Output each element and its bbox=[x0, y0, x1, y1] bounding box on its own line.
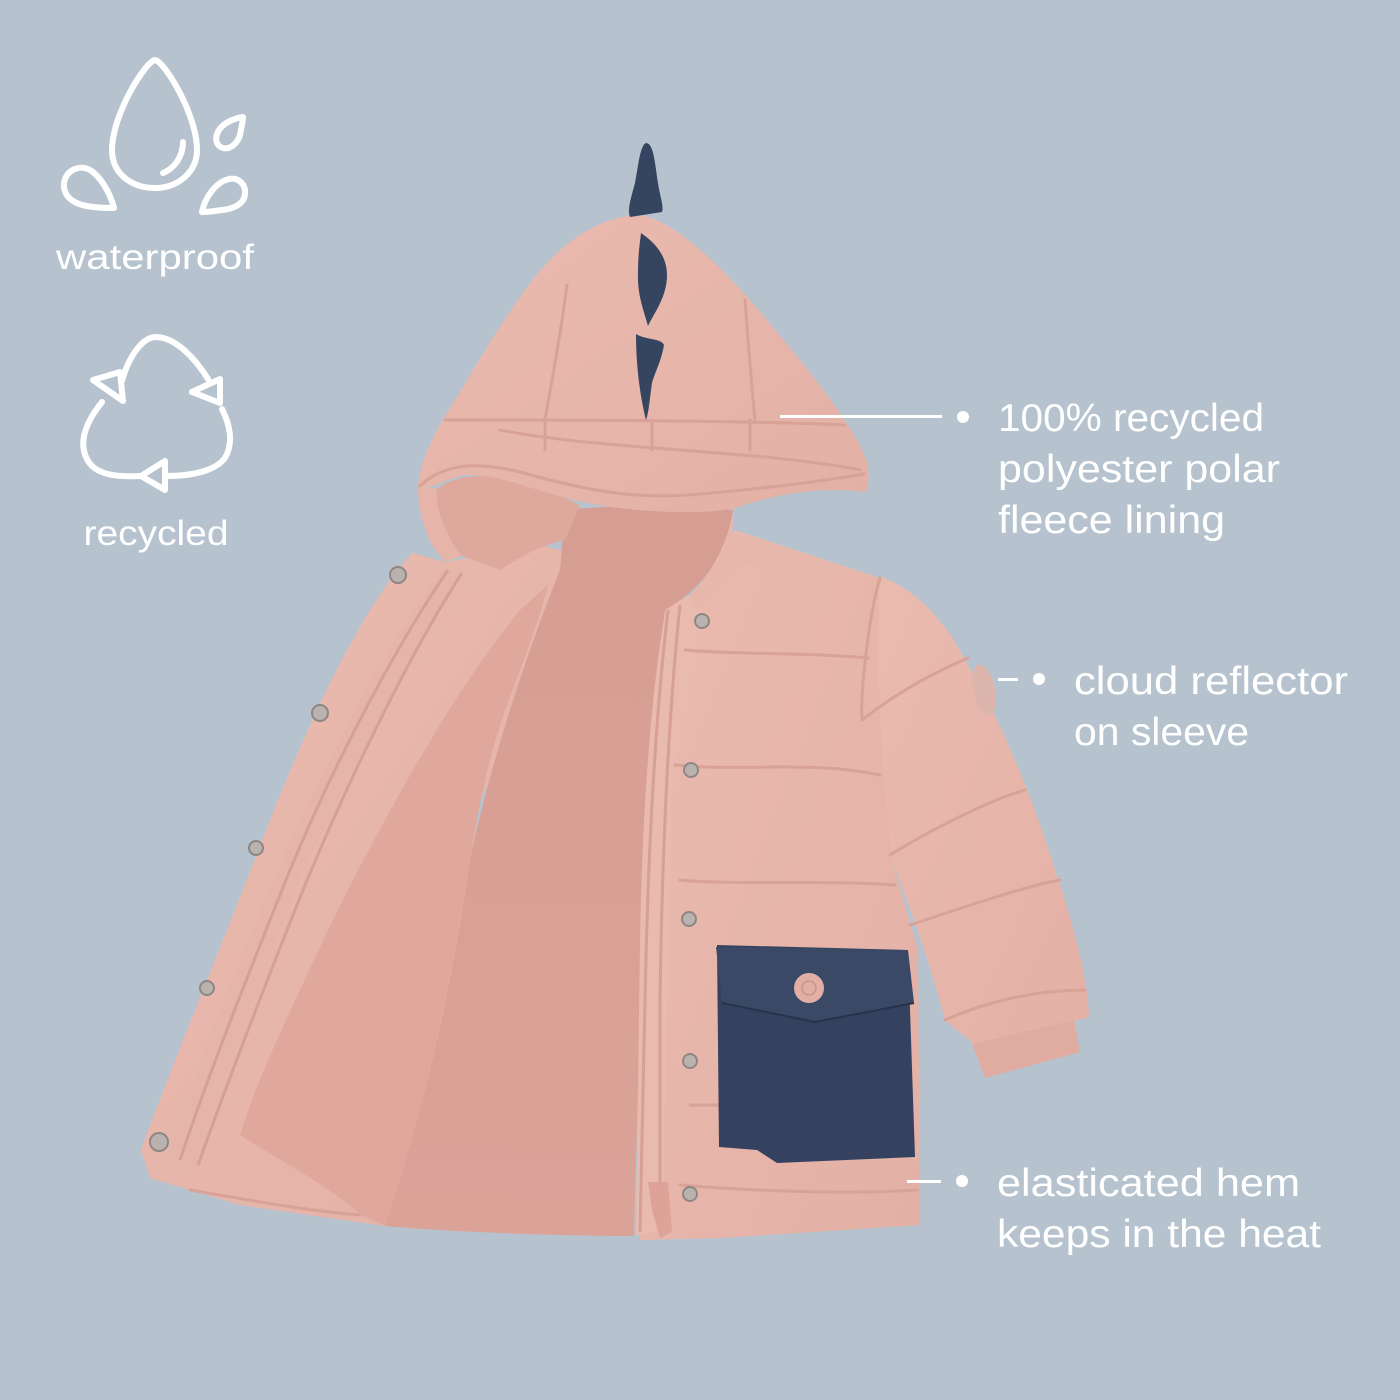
callout text: elasticated hem bbox=[997, 1162, 1300, 1205]
fleece lining, centre bbox=[385, 506, 733, 1236]
icon: recycled arrows bbox=[83, 337, 230, 490]
pocket button bbox=[794, 973, 824, 1003]
leader line bbox=[998, 673, 1045, 685]
main jacket left flap (shell) bbox=[141, 545, 600, 1226]
leader line bbox=[780, 411, 969, 423]
leader line bbox=[907, 1175, 968, 1187]
hood gather left bbox=[418, 488, 462, 562]
right collar bbox=[690, 505, 880, 610]
callout text: polyester polar bbox=[998, 448, 1280, 491]
snap buttons left bbox=[150, 567, 406, 1151]
label: recycled: recycled bbox=[84, 514, 228, 553]
snap buttons right bbox=[682, 614, 709, 1201]
sleeve reflector bbox=[968, 662, 1000, 718]
callout: cloud reflector bbox=[998, 660, 1348, 754]
jacket illustration bbox=[141, 143, 1089, 1240]
callout text: keeps in the heat bbox=[997, 1213, 1321, 1256]
quilting lines bbox=[190, 285, 1085, 1215]
callout: recycled polyester fleece bbox=[780, 397, 1280, 542]
callout: elasticated hem bbox=[907, 1162, 1321, 1256]
callout text: on sleeve bbox=[1074, 711, 1249, 754]
icon: waterproof drops bbox=[64, 60, 245, 212]
callout text: 100% recycled bbox=[998, 397, 1264, 440]
navy pocket bbox=[716, 945, 915, 1163]
callout text: fleece lining bbox=[998, 499, 1225, 542]
cuff bbox=[972, 1020, 1080, 1078]
sleeve bbox=[862, 577, 1089, 1078]
label: waterproof: waterproof bbox=[55, 238, 254, 277]
right zip placket bbox=[636, 598, 700, 1235]
left zip placket bbox=[165, 570, 465, 1165]
dino spikes bbox=[629, 143, 667, 420]
right panel body bbox=[640, 530, 920, 1240]
hood bbox=[418, 215, 869, 512]
callout text: cloud reflector bbox=[1074, 660, 1348, 703]
hood fleece upper left bbox=[436, 476, 580, 570]
zip pull bbox=[648, 1182, 672, 1238]
fleece front turned out bbox=[240, 585, 548, 1226]
